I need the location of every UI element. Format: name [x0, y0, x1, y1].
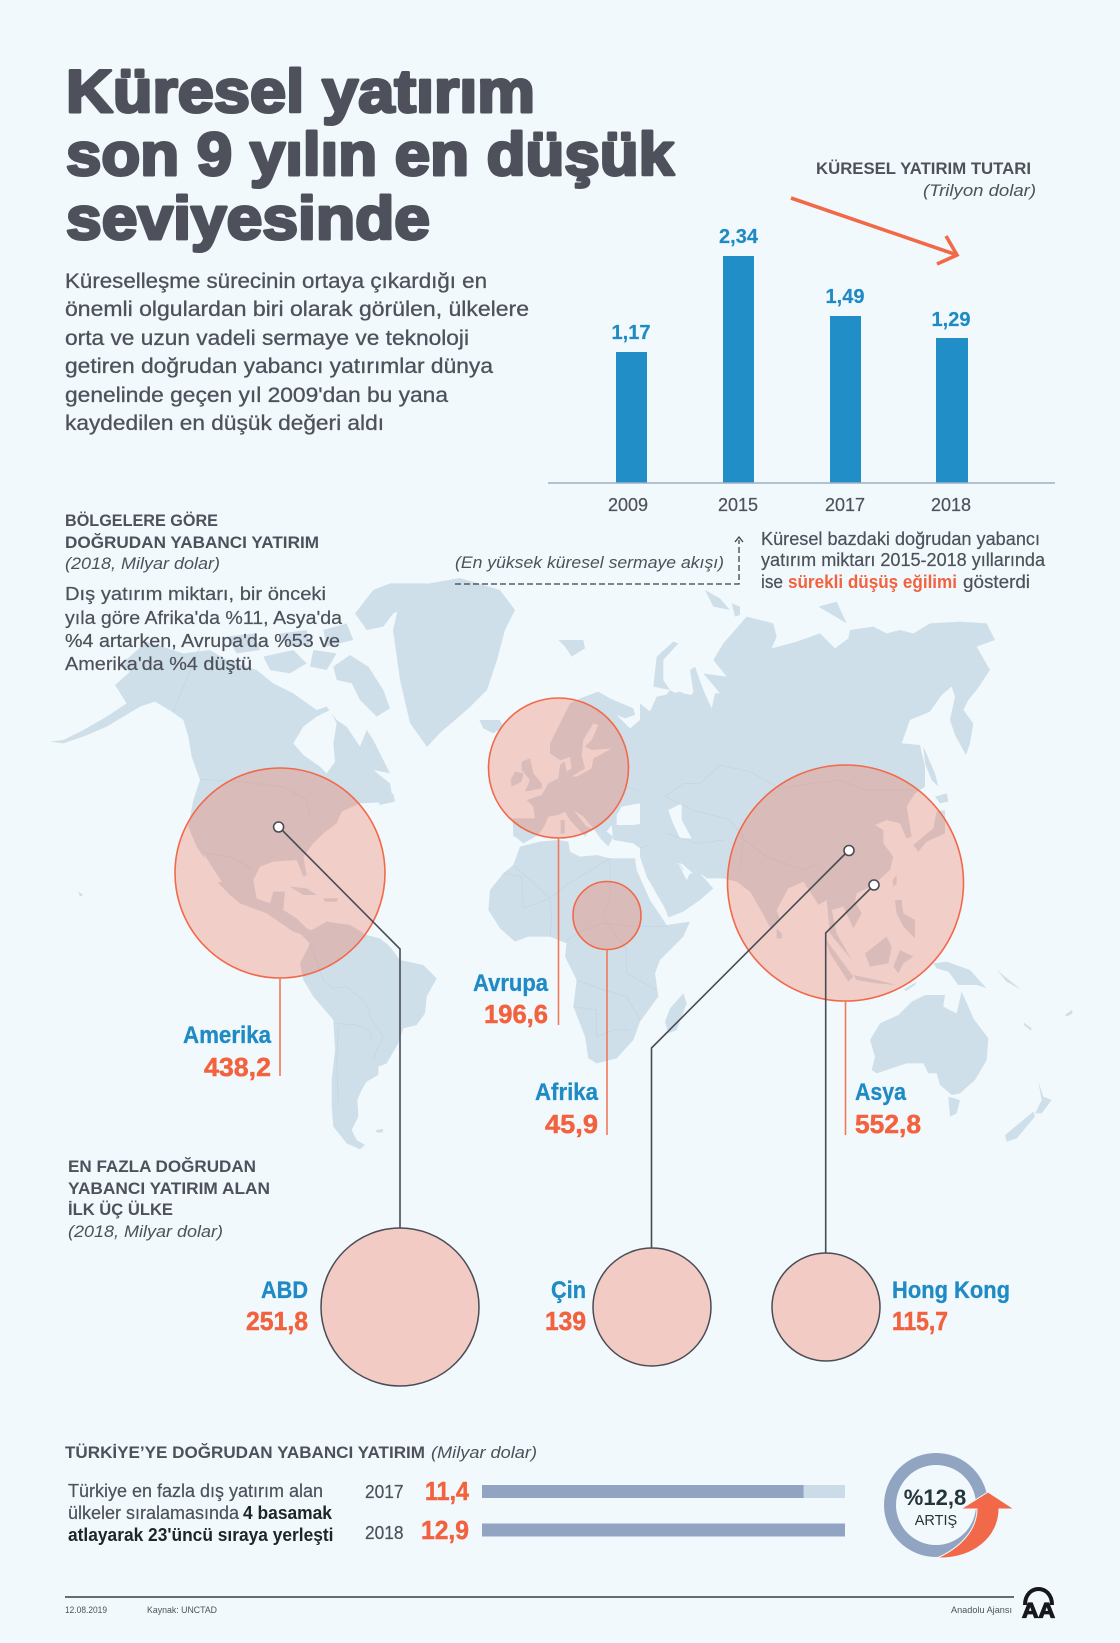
label: Asya: 552,8 [855, 1109, 921, 1139]
region leader lines [280, 838, 846, 1135]
text block: regional change: Amerika'da %4 düştü [65, 654, 252, 674]
bar values: 1,49 [826, 286, 864, 308]
label: Hong Kong: 115,7 [892, 1306, 948, 1336]
title [66, 58, 675, 252]
bars [616, 256, 968, 483]
text block: regional change: Dış yatırım miktarı, bir önceki [65, 584, 326, 604]
callout text: continuous decline: ise [761, 572, 783, 592]
increase badge [890, 1459, 1014, 1558]
logo: AA: AA [1022, 1600, 1055, 1622]
bar row: 2018: 2018 [365, 1523, 404, 1543]
logo: AA [1022, 1589, 1055, 1622]
text block: regional change [65, 584, 343, 674]
bar chart: global investment [548, 159, 1055, 515]
footer agency: Anadolu Ajansı [951, 1605, 1012, 1616]
footer source: Kaynak: UNCTAD [147, 1605, 217, 1616]
intro paragraph: Küreselleşme sürecinin ortaya çıkardığı en [65, 270, 487, 293]
chart heading: KÜRESEL YATIRIM TUTARI [816, 159, 1031, 178]
heading: investment by region: (2018, Milyar dolar) [65, 554, 220, 573]
year labels: 2017 [825, 495, 865, 515]
label: Avrupa: 196,6 [484, 999, 548, 1029]
map: greenland [393, 578, 515, 747]
label: Çin: Çin [551, 1277, 586, 1304]
text block: Türkiye ranking: Türkiye en fazla dış yatırım alan [68, 1481, 323, 1501]
label: Asya [855, 1079, 921, 1139]
heading: top three countries: İLK ÜÇ ÜLKE [68, 1200, 173, 1219]
year labels: 2018 [931, 495, 971, 515]
callout text: continuous decline: gösterdi [963, 572, 1030, 592]
heading: investment by region [65, 511, 319, 573]
label: Amerika [183, 1022, 272, 1082]
bubble: Amerika [175, 768, 385, 978]
bar row: 2017 [365, 1476, 845, 1506]
map: asia [640, 590, 995, 982]
label: Çin [545, 1277, 586, 1336]
bar row: 2018 [365, 1515, 845, 1545]
bar values: 2,34 [719, 226, 759, 248]
badge text: %12,8 [904, 1485, 966, 1510]
footer [65, 1589, 1055, 1622]
intro paragraph: genelinde geçen yıl 2009'dan bu yana [65, 384, 448, 407]
footer date: 12.08.2019 [65, 1605, 107, 1616]
intro paragraph: kaydedilen en düşük değeri aldı [65, 412, 384, 435]
world map [50, 578, 1073, 1149]
text block: Türkiye ranking: ülkeler sıralamasında [68, 1503, 240, 1523]
label: Amerika: 438,2 [204, 1052, 271, 1082]
heading: investment by region: DOĞRUDAN YABANCI YATIRIM [65, 533, 319, 552]
label: Afrika [535, 1079, 599, 1139]
heading: investment in Türkiye: (Milyar dolar) [431, 1443, 537, 1462]
heading: top three countries [68, 1157, 270, 1241]
bubble: Çin [593, 1248, 711, 1366]
arrow: downward trend [791, 198, 957, 264]
year labels: 2009 [608, 495, 648, 515]
text block: Türkiye ranking: 4 basamak [243, 1503, 333, 1523]
bar row: 2018: 12,9 [421, 1515, 469, 1545]
callout: highest capital flow [455, 537, 743, 584]
bar values [612, 226, 970, 344]
badge text [904, 1485, 966, 1529]
intro paragraph [65, 270, 529, 435]
label: Avrupa [473, 970, 549, 1029]
label: Asya: Asya [855, 1079, 907, 1106]
axis line [548, 482, 1055, 484]
map: africa and arabia [488, 840, 713, 1063]
title: Küresel yatırım [66, 58, 535, 125]
heading: top three countries: YABANCI YATIRIM ALAN [68, 1180, 270, 1198]
callout text: continuous decline: Küresel bazdaki doğrudan yabancı [761, 529, 1040, 549]
title: son 9 yılın en düşük [66, 121, 675, 188]
text block: regional change: %4 artarken, Avrupa'da %53 ve [65, 631, 340, 651]
heading: investment in Türkiye [65, 1443, 537, 1462]
label: Çin: 139 [545, 1306, 586, 1336]
intro paragraph: getiren doğrudan yabancı yatırımlar dünya [65, 355, 493, 378]
arrow: increase [937, 1492, 1014, 1558]
bar row: 2017: 11,4 [425, 1476, 469, 1506]
heading: top three countries: (2018, Milyar dolar) [68, 1222, 223, 1241]
callout text: continuous decline: yatırım miktarı 2015-2018 yıllarında [761, 550, 1046, 570]
region bubbles [175, 698, 964, 1001]
bubble: Afrika [573, 882, 641, 950]
label: Afrika: Afrika [535, 1079, 599, 1106]
bubble: Asya [728, 765, 964, 1001]
location dots [274, 822, 879, 890]
intro paragraph: önemli olgulardan biri olarak görülen, ülkelere [65, 298, 529, 321]
label: Afrika: 45,9 [545, 1109, 598, 1139]
ring [890, 1459, 982, 1551]
label: Hong Kong [892, 1277, 1010, 1336]
bubble: Hong Kong [772, 1253, 880, 1361]
chart heading [816, 159, 1036, 200]
text block: Türkiye ranking: atlayarak 23'üncü sıraya yerleşti [68, 1525, 334, 1545]
map: north america [50, 583, 432, 942]
bubble: ABD [321, 1228, 479, 1386]
intro paragraph: orta ve uzun vadeli sermaye ve teknoloji [65, 327, 469, 350]
map: europe and western russia [479, 640, 730, 878]
label: Avrupa: Avrupa [473, 970, 549, 997]
year labels [608, 495, 971, 515]
bar values: 1,17 [612, 322, 650, 344]
badge text: ARTIŞ [915, 1513, 957, 1529]
label: ABD: 251,8 [246, 1306, 308, 1336]
bar values: 1,29 [932, 309, 970, 331]
label: Amerika: Amerika [183, 1022, 272, 1049]
text block: regional change: yıla göre Afrika'da %11, Asya'da [65, 608, 343, 628]
map: south america [300, 922, 437, 1149]
callout text: continuous decline: sürekli düşüş eğilimi [788, 572, 957, 592]
title: seviyesinde [66, 185, 430, 252]
label: Hong Kong: Hong Kong [892, 1277, 1010, 1304]
heading: investment by region: BÖLGELERE GÖRE [65, 511, 218, 530]
label: ABD [246, 1277, 308, 1336]
bar row: 2017: 2017 [365, 1482, 404, 1502]
bubble: Avrupa [488, 698, 628, 838]
text block: Türkiye ranking [68, 1481, 334, 1545]
year labels: 2015 [718, 495, 758, 515]
callout: highest capital flow: (En yüksek küresel sermaye akışı) [455, 553, 724, 572]
heading: investment in Türkiye: TÜRKİYE’YE DOĞRUDAN YABANCI YATIRIM [65, 1443, 425, 1462]
heading: top three countries: EN FAZLA DOĞRUDAN [68, 1157, 256, 1176]
map: oceania [853, 950, 1073, 1142]
label: ABD: ABD [261, 1277, 308, 1304]
country connector lines [279, 827, 874, 1254]
chart heading: (Trilyon dolar) [923, 181, 1036, 200]
callout text: continuous decline [761, 529, 1046, 592]
